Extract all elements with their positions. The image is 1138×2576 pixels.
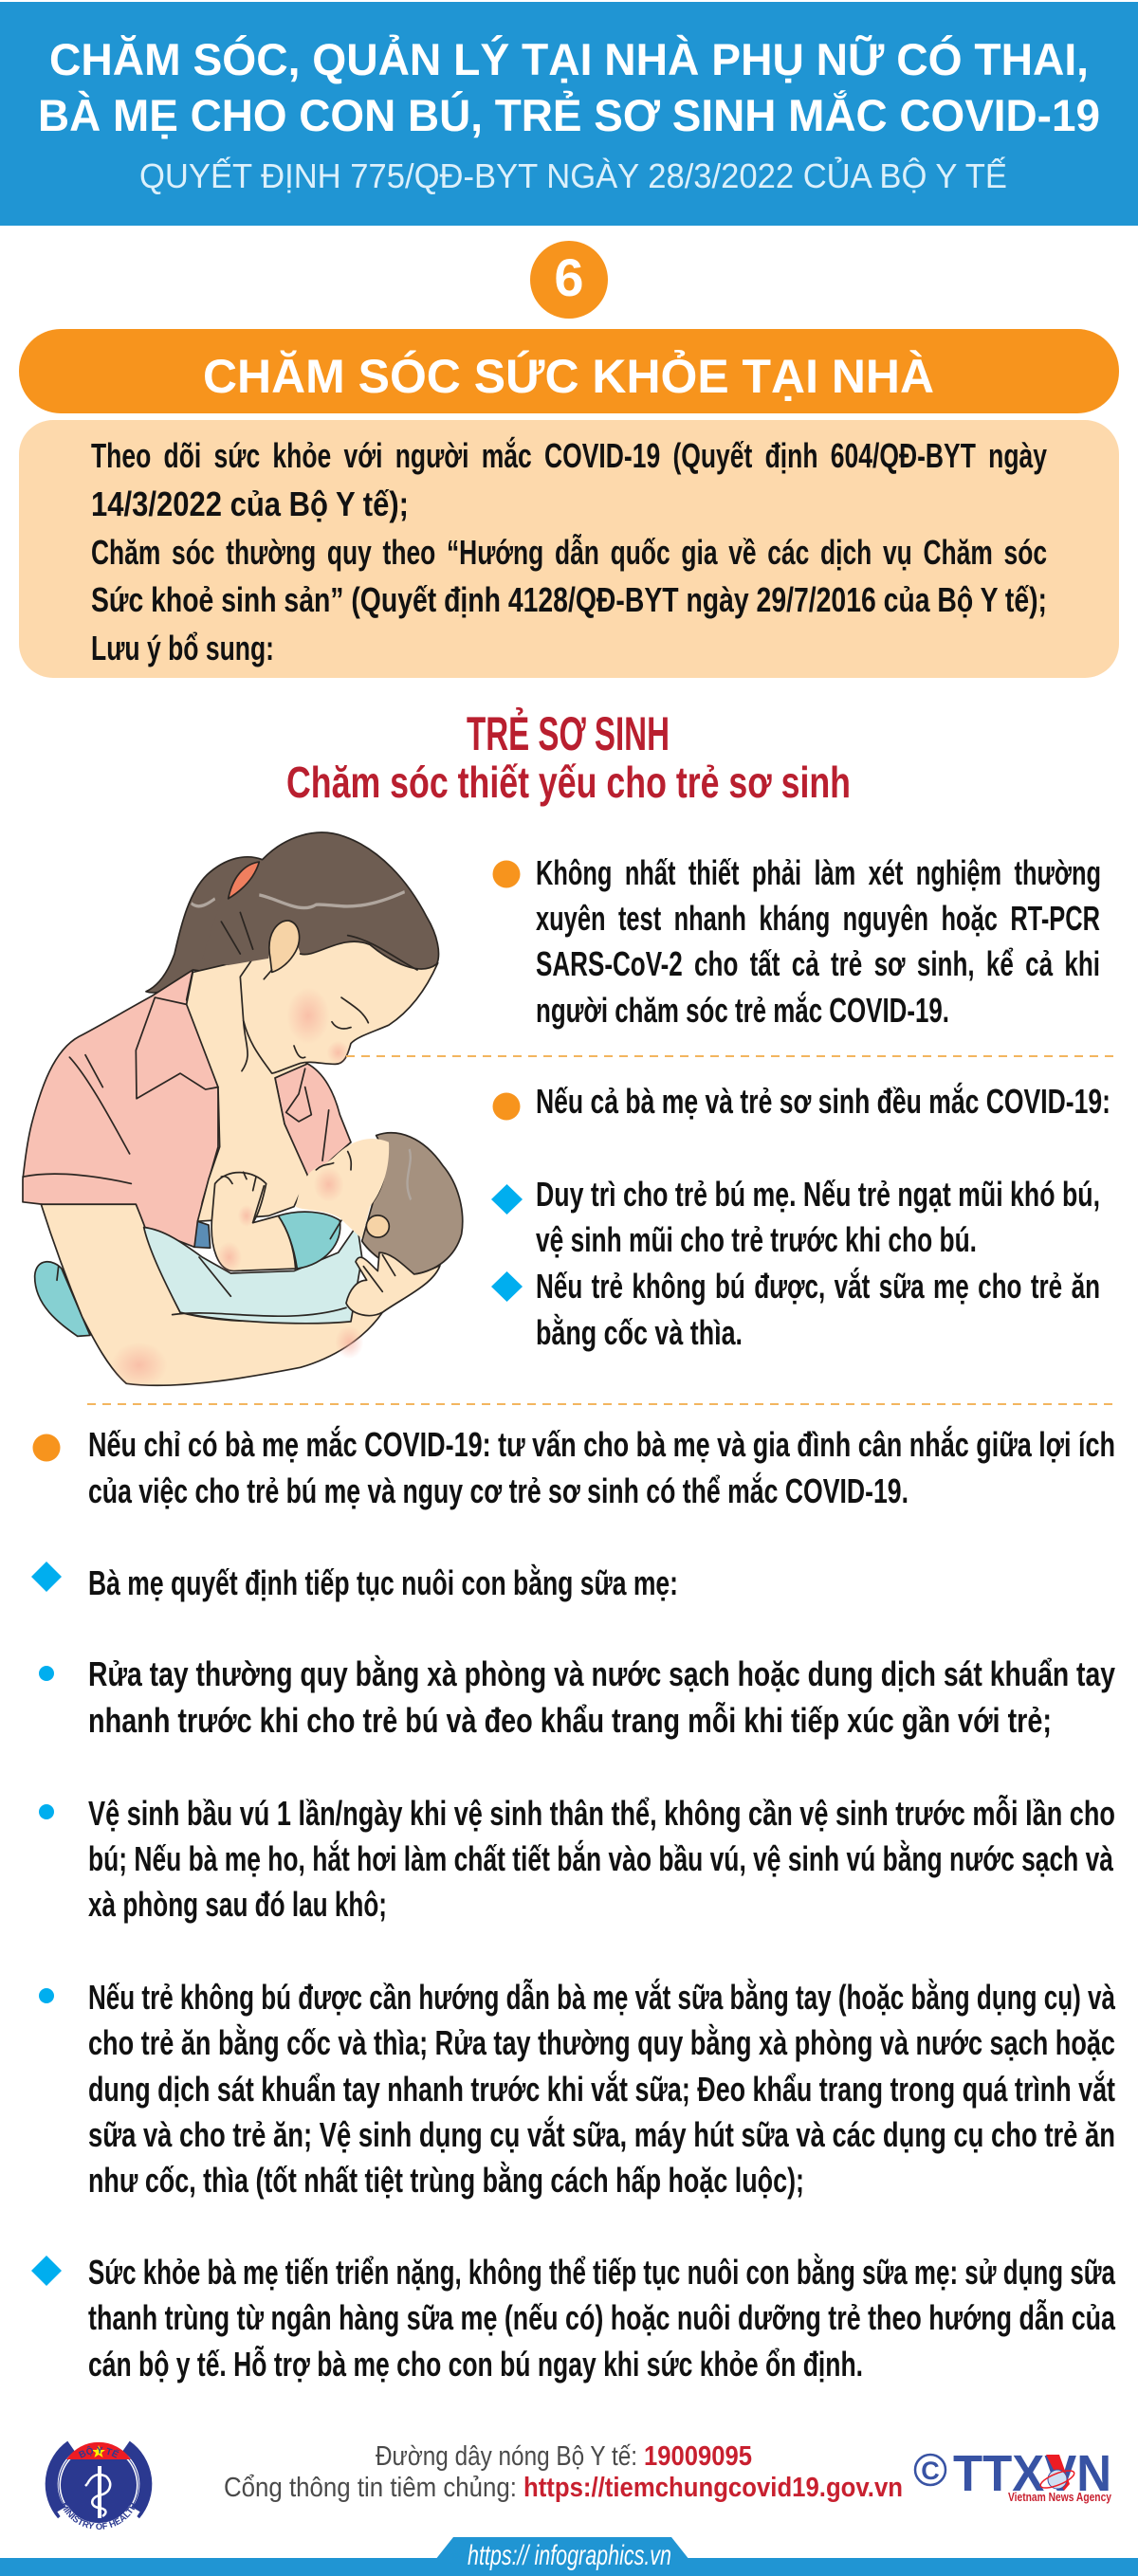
main title: BÀ MẸ CHO CON BÚ, TRẺ SƠ SINH MẮC COVID-19 (38, 90, 1100, 140)
baby hair (362, 1133, 463, 1274)
point: express milk: bằng cốc và thìa. (536, 1312, 743, 1352)
subsection heading: TRẺ SƠ SINH (467, 707, 670, 760)
section heading bar (19, 329, 1119, 413)
baby foot (35, 1262, 90, 1336)
footer contact info: Đường dây nóng Bộ Y tế: (376, 2441, 637, 2472)
mother hand (346, 1252, 440, 1316)
point: mother severely ill: cán bộ y tế. Hỗ trợ bà mẹ cho con bú ngay khi sức khỏe ổn định. (88, 2345, 863, 2384)
number badge 6: 6 (554, 247, 584, 307)
footer band (0, 2537, 1138, 2576)
logo: TTXVN: C (921, 2457, 940, 2485)
hair highlights (192, 892, 411, 1199)
subsection heading (286, 707, 851, 807)
point: expressing milk guidance (39, 1977, 1116, 2200)
mother face (240, 936, 438, 1073)
blush marks (111, 987, 363, 1388)
cuff (194, 1221, 211, 1248)
footer contact info: Cổng thông tin tiêm chủng: (224, 2473, 517, 2503)
number badge 6 (530, 241, 608, 319)
footer contact info: 19009095 (644, 2441, 752, 2472)
divider line bottom (87, 1403, 1115, 1405)
logo: Ministry of Health: BỘ Y TẾ (78, 2446, 119, 2458)
point: mother continues breastfeeding: Bà mẹ quyết định tiếp tục nuôi con bằng sữa mẹ: (88, 1562, 678, 1602)
panel: intro notes: Lưu ý bổ sung: (91, 629, 274, 667)
point: maintain breastfeeding (491, 1175, 1100, 1259)
panel: intro notes: 14/3/2022 của Bộ Y tế); (91, 484, 409, 523)
mother ear (269, 921, 300, 972)
header banner (0, 2, 1138, 226)
point: breast hygiene (39, 1794, 1115, 1924)
point: mother continues breastfeeding (31, 1562, 678, 1602)
divider line top (346, 1055, 1115, 1057)
logo: TTXVN: Vietnam News Agency (1008, 2490, 1112, 2504)
panel: intro notes (19, 420, 1119, 678)
mother hair (202, 832, 438, 969)
point: express milk (491, 1266, 1100, 1352)
mother lower arm (41, 1204, 439, 1385)
point: hand washing (39, 1653, 1115, 1740)
hair tie (229, 862, 259, 899)
mother ponytail (146, 857, 272, 993)
point: mother severely ill (31, 2252, 1116, 2384)
baby sleeve (278, 1212, 340, 1269)
mother shirt (23, 970, 218, 1247)
baby face (296, 1139, 389, 1239)
point: no routine testing: người chăm sóc trẻ mắc COVID-19. (536, 990, 949, 1030)
point: breast hygiene: xà phòng sau đó lau khô; (88, 1885, 387, 1924)
baby arm and hand (211, 1173, 296, 1271)
point: only mother infected (32, 1424, 1115, 1510)
point: expressing milk guidance: như cốc, thìa (tốt nhất tiệt trùng bằng cách hấp hoặc luộc); (88, 2160, 804, 2200)
drawn line details (23, 832, 438, 1316)
illustration: mother breastfeeding baby (23, 832, 463, 1388)
subtitle: QUYẾT ĐỊNH 775/QĐ-BYT NGÀY 28/3/2022 CỦA BỘ Y TẾ (139, 155, 1007, 195)
logo: Ministry of Health (46, 2440, 152, 2530)
point: maintain breastfeeding: vệ sinh mũi cho trẻ trước khi cho bú. (536, 1220, 977, 1259)
footer contact info (224, 2441, 903, 2503)
subsection heading: Chăm sóc thiết yếu cho trẻ sơ sinh (286, 758, 851, 807)
main title (38, 34, 1100, 140)
logo: Ministry of Health: MINISTRY OF HEALTH (63, 2503, 135, 2530)
section heading bar: CHĂM SÓC SỨC KHỎE TẠI NHÀ (203, 349, 934, 403)
point: no routine testing (493, 853, 1101, 1030)
baby body (144, 1225, 362, 1324)
logo: TTXVN: TTXVN (953, 2445, 1111, 2502)
footer contact info: https://tiemchungcovid19.gov.vn (523, 2473, 903, 2503)
footer band: https:// infographics.vn (468, 2540, 671, 2571)
baby ear (366, 1215, 389, 1237)
main title: CHĂM SÓC, QUẢN LÝ TẠI NHÀ PHỤ NỮ CÓ THAI, (49, 34, 1089, 84)
mother neck and chest (187, 954, 308, 1221)
mother shirt far side (275, 1063, 351, 1177)
